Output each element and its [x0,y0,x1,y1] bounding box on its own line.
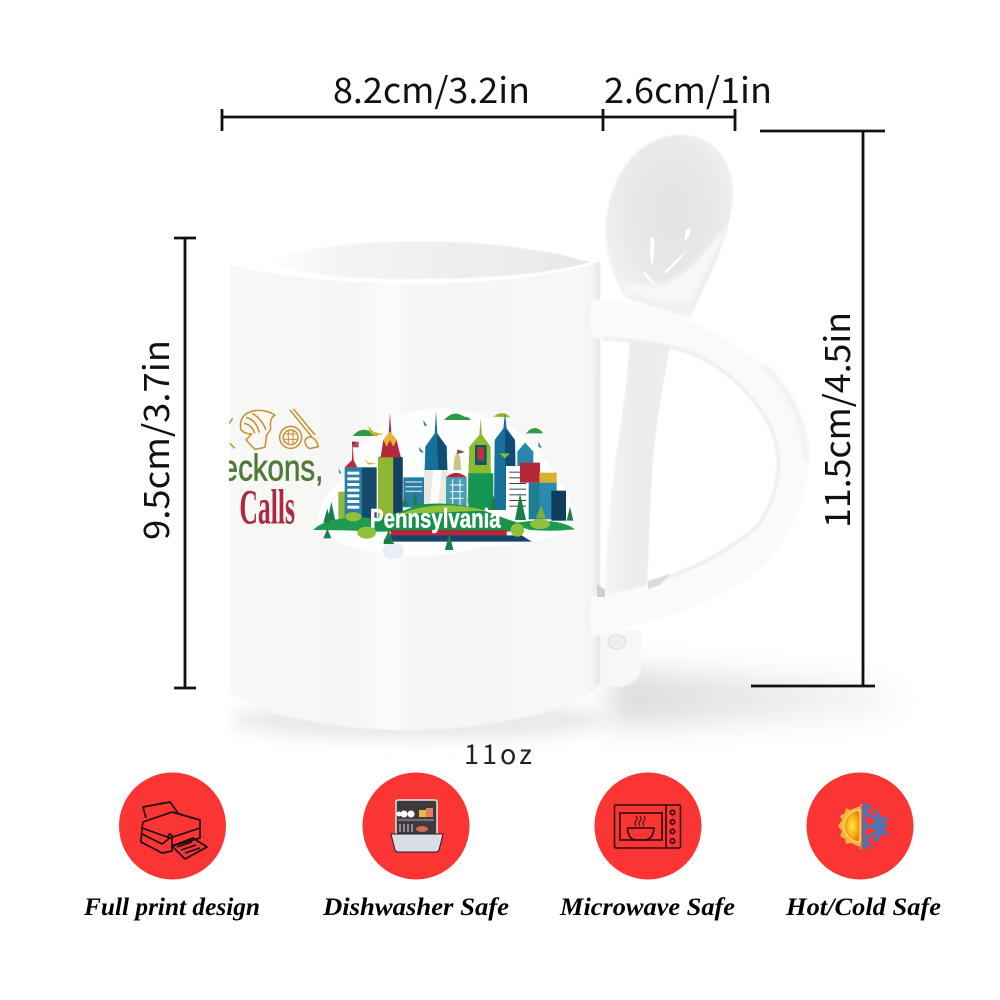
birds [368,426,383,436]
gold icons [229,409,318,449]
feature: full print [83,772,260,921]
place name: Pennsylvania [370,503,501,533]
label: full print: Full print design [83,894,260,921]
spoon handle [604,330,671,600]
spoon [598,135,733,687]
dimension: total height [751,131,885,686]
mug inner rim [268,241,592,279]
infographic [84,75,940,920]
icon: microwave [614,805,680,848]
dimension: mug width and spoon [222,63,735,131]
print: Pennsylvania skyline [313,408,575,559]
feature: hot cold [785,772,941,921]
icon: printer [141,802,207,859]
feature: microwave [559,772,735,921]
ground [313,517,377,532]
flag [352,442,359,447]
white cloud backing [317,408,575,556]
buildings [338,492,348,522]
capacity label: 11oz [464,733,532,772]
clouds [353,430,377,436]
icon: sun and snowflake [838,804,886,849]
label 11.5cm: 11.5cm/4.5in [810,312,861,528]
label 9.5cm: 9.5cm/3.7in [129,340,180,540]
spoon hole [608,635,626,649]
mug shadow [230,668,910,740]
handle shade patches [597,584,605,597]
spoon bowl [606,135,733,318]
motto: green line: eckons, [222,447,323,489]
mug print [222,408,575,559]
print: left motto [229,408,321,524]
label: dishwasher: Dishwasher Safe [322,894,509,921]
label 8.2cm: 8.2cm/3.2in [333,63,530,114]
motto: red line: Calls [239,478,295,534]
dimension: mug height [129,238,196,688]
label: microwave: Microwave Safe [559,894,735,921]
spoon lower tip [598,630,641,687]
feature: dishwasher [322,772,509,921]
mug handle [590,300,809,649]
icon: dishwasher [391,800,443,852]
label 2.6cm: 2.6cm/1in [604,63,772,114]
trees [323,492,573,550]
mug body [229,241,600,730]
label: hot cold: Hot/Cold Safe [785,894,941,921]
